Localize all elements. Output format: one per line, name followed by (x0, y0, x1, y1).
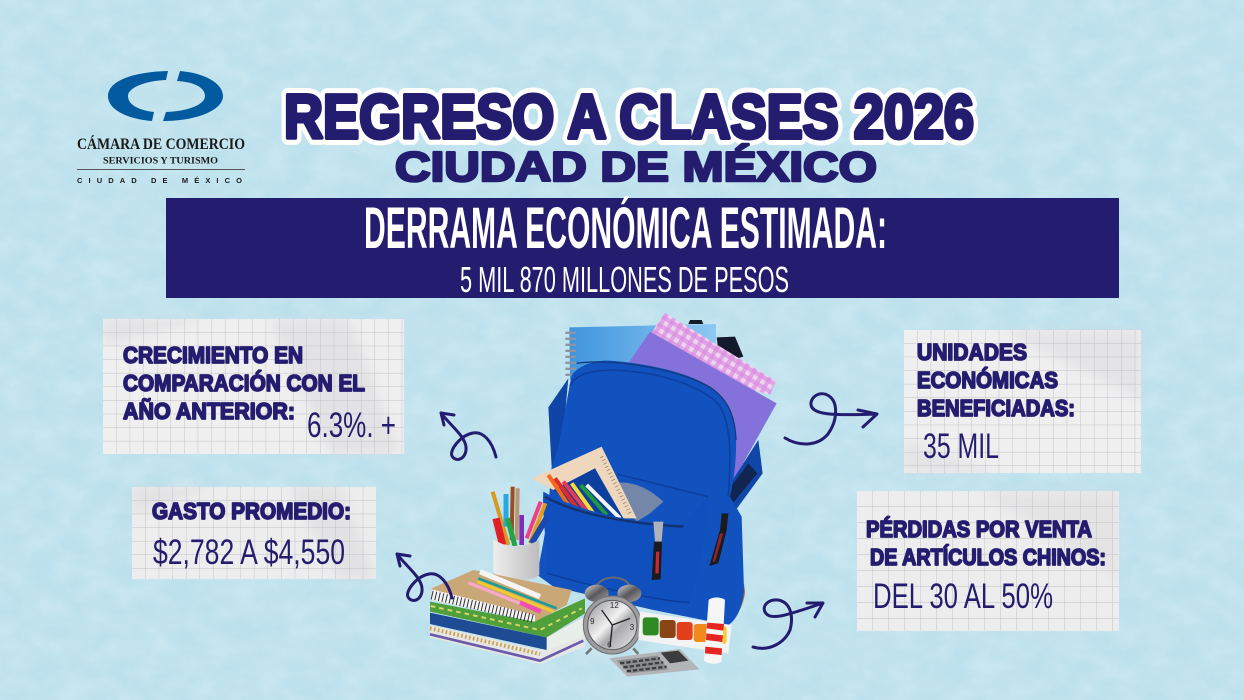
pencil cup (493, 487, 547, 580)
logo subtitle: SERVICIOS Y TURISMO (103, 156, 218, 166)
panel heading: UNIDADES (917, 339, 1027, 365)
title: REGRESO A CLASES 2026 (284, 83, 974, 152)
notebook stack (430, 570, 585, 664)
panel: pérdidas (857, 491, 1119, 631)
blue spiral notebook (569, 324, 716, 380)
panel heading (123, 342, 365, 424)
panel heading: BENEFICIADAS: (917, 395, 1075, 421)
panel: gasto promedio (132, 487, 376, 579)
panel value: 35 MIL (923, 427, 999, 466)
arrow: to crecimiento (441, 413, 496, 459)
illustration: backpack and school supplies (430, 313, 777, 677)
panel: crecimiento (103, 319, 404, 454)
alarm clock: 6 (607, 640, 612, 649)
panel heading: AÑO ANTERIOR: (123, 397, 295, 424)
banner amount: 5 MIL 870 MILLONES DE PESOS (460, 259, 789, 300)
subtitle: CIUDAD DE MÉXICO (395, 143, 877, 190)
glue stick (704, 597, 725, 664)
panel heading (866, 515, 1106, 570)
arrow: to unidades económicas (785, 394, 877, 444)
panel heading (917, 339, 1075, 421)
pocket contents: ruler and pencils (532, 447, 663, 522)
backpack strap behind notebooks (688, 320, 743, 363)
alarm clock: 12 (610, 601, 619, 610)
panel heading: ECONÓMICAS (917, 366, 1058, 393)
panel heading: GASTO PROMEDIO: (152, 498, 351, 524)
panel heading: CRECIMIENTO EN (123, 342, 303, 368)
panel value: DEL 30 AL 50% (873, 577, 1053, 616)
panel heading: DE ARTÍCULOS CHINOS: (870, 543, 1106, 570)
panel value: $2,782 A $4,550 (153, 533, 345, 572)
banner: derrama económica (166, 196, 1119, 300)
alarm clock (583, 577, 641, 654)
panel heading: COMPARACIÓN CON EL (123, 369, 365, 396)
calculator (609, 649, 699, 677)
panel: unidades económicas (904, 330, 1141, 473)
logo mark (108, 71, 223, 121)
purple folder (629, 332, 777, 487)
alarm clock: 9 (590, 617, 595, 626)
panel value: 6.3%. + (307, 406, 396, 445)
front pocket (543, 492, 728, 603)
logo city: CIUDAD DE MÉXICO (77, 176, 242, 185)
logo name: CÁMARA DE COMERCIO (77, 136, 245, 153)
title: REGRESO A CLASES 2026 (284, 83, 974, 152)
backpack (537, 361, 763, 625)
alarm clock: 3 (630, 623, 635, 632)
paint palette (638, 612, 732, 653)
panel heading: PÉRDIDAS POR VENTA (866, 515, 1092, 542)
arrow: to pérdidas (753, 600, 823, 648)
pink plaid notebook (633, 313, 776, 395)
logo: Cámara de Comercio (77, 71, 245, 185)
arrow: to gasto promedio (397, 554, 452, 600)
